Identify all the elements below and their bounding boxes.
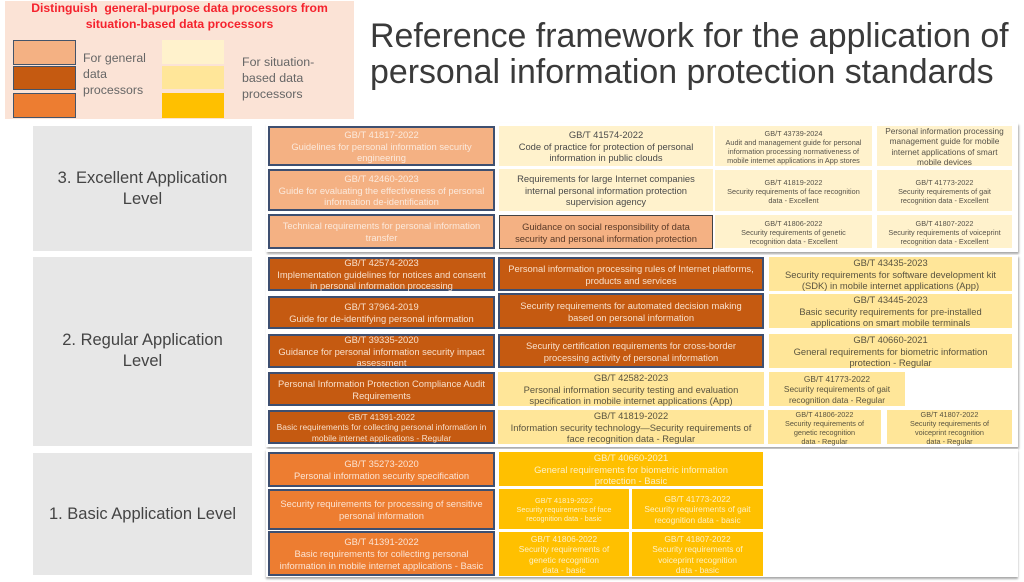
title: Reference framework for the application of xyxy=(370,17,1009,55)
situation standard 41806 basic xyxy=(499,532,629,576)
general standard platforms rules xyxy=(498,257,764,291)
situation standard 41807 excellent: Security requirements of voiceprint xyxy=(888,228,1001,236)
situation standard 40660 regular: protection - Regular xyxy=(849,357,932,368)
situation standard 41806 regular: genetic recognition xyxy=(794,428,855,436)
situation standard 41773 basic xyxy=(632,489,763,529)
panel: basic level standards xyxy=(266,449,1018,577)
situation standard 41806 regular: Security requirements of xyxy=(785,418,864,428)
situation standard 41819 basic xyxy=(499,489,629,529)
situation standard 41574: GB/T 41574-2022 xyxy=(569,129,643,140)
general standard 42574: Implementation guidelines for notices and consent xyxy=(277,269,486,280)
situation standard 41806 excellent: Security requirements of genetic xyxy=(741,228,846,236)
situation standard 41574: information in public clouds xyxy=(549,152,663,163)
general standard 37964: GB/T 37964-2019 xyxy=(344,301,419,312)
situation standard 41806 excellent xyxy=(715,215,872,248)
general standard transfer: Technical requirements for personal information xyxy=(283,220,480,231)
level label 2: 2. Regular Application xyxy=(62,331,223,349)
situation standard 41819 basic: GB/T 41819-2022 xyxy=(535,496,593,505)
general standard 39335: GB/T 39335-2020 xyxy=(344,334,419,345)
general standard 39335 xyxy=(268,334,495,368)
situation standard 41773 excellent: GB/T 41773-2022 xyxy=(916,178,973,186)
situation standard smart mobile devices: mobile devices xyxy=(917,157,972,167)
general standard 41391 regular: Basic requirements for collecting personal information in xyxy=(277,422,486,432)
situation standard 43435: (SDK) in mobile internet applications (App) xyxy=(802,280,979,291)
general standard 42574: in personal information processing xyxy=(310,280,453,291)
panel: regular level standards xyxy=(266,255,1018,447)
swatch: situation regular xyxy=(162,66,224,89)
general standard social responsibility: security and personal information protection xyxy=(515,232,697,244)
situation standard 43445: GB/T 43445-2023 xyxy=(853,294,928,305)
situation standard large internet companies: Requirements for large Internet companies xyxy=(517,173,695,184)
situation standard 43739: information processing normativeness of xyxy=(728,146,859,156)
situation standard 41807 excellent xyxy=(877,215,1012,248)
level label 3: Level xyxy=(123,190,162,208)
situation standard 40660 basic: GB/T 40660-2021 xyxy=(594,452,668,463)
situation standard 41806 excellent: recognition data - Excellent xyxy=(749,236,838,246)
general standard 41817 xyxy=(268,126,495,166)
swatch: situation excellent xyxy=(162,40,224,64)
general standard platforms rules: products and services xyxy=(585,274,677,286)
general standard cross-border xyxy=(498,334,764,368)
situation standard 40660 regular xyxy=(769,334,1012,368)
situation standard 41773 regular: Security requirements of gait xyxy=(784,384,890,394)
swatch: general excellent xyxy=(13,40,76,65)
general standard 37964 xyxy=(268,296,495,329)
situation standard 41773 regular: recognition data - Regular xyxy=(789,395,885,405)
situation standard 41574: Code of practice for protection of personal xyxy=(519,141,693,152)
general standard 41391 regular xyxy=(268,410,495,444)
panel: excellent level standards xyxy=(266,123,1018,252)
situation standard 43739: mobile internet applications in App stores xyxy=(727,156,860,164)
general standard 41391 regular: mobile internet applications - Regular xyxy=(312,433,451,443)
situation standard 43435: GB/T 43435-2023 xyxy=(853,257,928,268)
legend heading: Distinguish general-purpose data processors from xyxy=(31,1,328,15)
situation standard 41773 regular xyxy=(769,372,905,406)
general standard cross-border: processing activity of personal information xyxy=(544,352,718,362)
general standard compliance audit xyxy=(268,372,495,406)
situation standard 41807 basic: GB/T 41807-2022 xyxy=(664,534,731,544)
situation standard 40660 basic: General requirements for biometric information xyxy=(534,464,728,475)
situation standard 41773 excellent xyxy=(877,170,1012,211)
situation standard 40660 basic: protection - Basic xyxy=(595,475,667,486)
situation standard 41773 basic: Security requirements of gait xyxy=(644,504,751,514)
general standard 41817: engineering xyxy=(357,152,406,163)
general standard 42460: Guide for evaluating the effectiveness of personal xyxy=(279,185,484,196)
title: personal information protection standards xyxy=(370,53,994,91)
legend label: general xyxy=(83,51,146,97)
situation standard 43445 xyxy=(769,294,1012,328)
situation standard 42582 xyxy=(498,372,764,406)
general standard compliance audit: Requirements xyxy=(352,390,411,400)
legend heading xyxy=(31,1,328,31)
situation standard smart mobile devices xyxy=(877,126,1012,166)
situation standard 41819 regular: face recognition data - Regular xyxy=(567,433,695,444)
situation standard 43739: Audit and management guide for personal xyxy=(726,138,861,146)
situation standard 42582: GB/T 42582-2023 xyxy=(594,372,668,383)
legend label: general: data xyxy=(83,67,107,81)
level label 2 xyxy=(33,257,252,446)
level label 2: Level xyxy=(123,352,162,370)
general standard social responsibility: Guidance on social responsibility of data xyxy=(522,221,690,232)
situation standard 41819 basic: Security requirements of face xyxy=(517,505,611,514)
situation standard 41807 excellent: recognition data - Excellent xyxy=(900,236,989,246)
level label 1: 1. Basic Application Level xyxy=(49,505,236,523)
situation standard 41807 regular: data - Regular xyxy=(926,436,973,446)
general standard 41391 regular: GB/T 41391-2022 xyxy=(348,412,415,422)
situation standard 41819 excellent: data - Excellent xyxy=(768,196,819,204)
situation standard 41807 regular: GB/T 41807-2022 xyxy=(921,410,978,418)
situation standard 40660 regular: General requirements for biometric information xyxy=(794,346,987,357)
situation standard 41807 basic: Security requirements of xyxy=(652,544,743,554)
general standard transfer: transfer xyxy=(366,232,397,243)
general standard 37964: Guide for de-identifying personal information xyxy=(289,313,474,324)
situation standard 41806 basic: Security requirements of xyxy=(519,544,609,554)
situation standard 41806 excellent: GB/T 41806-2022 xyxy=(765,218,822,228)
situation standard 41773 excellent: Security requirements of gait xyxy=(898,186,991,196)
situation standard 41574 xyxy=(499,126,713,166)
general standard 42574 xyxy=(268,257,495,291)
situation standard large internet companies: supervision agency xyxy=(566,196,646,207)
general standard automated decision making: based on personal information xyxy=(568,312,694,322)
situation standard 41806 basic: data - basic xyxy=(542,565,586,575)
general standard 42574: GB/T 42574-2023 xyxy=(344,257,419,268)
level label 3 xyxy=(33,126,252,251)
situation standard 41819 excellent: Security requirements of face recognition xyxy=(727,186,860,196)
situation standard large internet companies xyxy=(499,169,713,211)
legend label: situation: based data xyxy=(242,71,303,85)
general standard compliance audit: Personal Information Protection Compliance Audit xyxy=(278,378,485,389)
general standard 41817: Guidelines for personal information security xyxy=(291,141,472,152)
situation standard smart mobile devices: Personal information processing xyxy=(885,126,1004,136)
situation standard 41807 basic xyxy=(632,532,763,576)
situation standard 43739: GB/T 43739-2024 xyxy=(765,128,822,138)
general standard 35273: GB/T 35273-2020 xyxy=(344,458,419,469)
general standard sensitive information xyxy=(268,489,495,530)
general standard transfer xyxy=(268,214,495,249)
general standard 41391 basic: GB/T 41391-2022 xyxy=(344,536,419,547)
situation standard 41773 basic: recognition data - basic xyxy=(654,515,741,525)
situation standard 43435 xyxy=(769,257,1012,291)
general standard 42460: information de-identification xyxy=(324,196,439,207)
general standard sensitive information: Security requirements for processing of sensitive xyxy=(280,498,483,509)
situation standard 41819 basic: recognition data - basic xyxy=(526,514,602,523)
situation standard 41773 excellent: recognition data - Excellent xyxy=(900,196,989,204)
general standard 35273: Personal information security specification xyxy=(294,470,469,481)
situation standard 41806 basic: GB/T 41806-2022 xyxy=(531,534,597,544)
general standard 41391 basic: information in mobile internet applications - Basic xyxy=(280,560,483,571)
situation standard 41819 regular: Information security technology—Security requirements of xyxy=(511,422,751,433)
situation standard large internet companies: internal personal information protection xyxy=(525,185,687,196)
situation standard 41819 regular: GB/T 41819-2022 xyxy=(594,410,668,421)
legend label: situation: For situation- xyxy=(242,55,314,69)
legend label: general: processors xyxy=(83,83,143,97)
general standard 39335: Guidance for personal information security impact xyxy=(278,346,485,357)
situation standard 41773 regular: GB/T 41773-2022 xyxy=(804,374,870,384)
general standard automated decision making xyxy=(498,293,764,329)
situation standard 41807 regular xyxy=(887,410,1012,444)
general standard 39335: assessment xyxy=(356,357,406,368)
situation standard 43739 xyxy=(715,126,872,166)
general standard 42460: GB/T 42460-2023 xyxy=(344,173,419,184)
situation standard 40660 basic xyxy=(499,452,763,486)
legend label: situation xyxy=(242,55,314,101)
situation standard 42582: Personal information security testing and evaluation xyxy=(524,384,738,395)
situation standard 43445: Basic security requirements for pre-installed xyxy=(799,306,982,317)
general standard 41817: GB/T 41817-2022 xyxy=(344,129,419,140)
swatch: general basic xyxy=(13,93,76,118)
general standard social responsibility xyxy=(499,215,713,249)
general standard cross-border: Security certification requirements for cross-border xyxy=(526,340,736,351)
situation standard 43435: Security requirements for software development kit xyxy=(785,269,996,280)
situation standard 40660 regular: GB/T 40660-2021 xyxy=(853,334,928,345)
general standard sensitive information: personal information xyxy=(339,510,424,521)
swatch: general regular xyxy=(13,66,76,90)
situation standard 41806 regular xyxy=(768,410,881,444)
general standard 41391 basic xyxy=(268,531,495,576)
general standard automated decision making: Security requirements for automated decision making xyxy=(520,300,742,311)
situation standard 41819 excellent xyxy=(715,170,872,211)
situation standard 41807 basic: voiceprint recognition xyxy=(658,554,737,564)
situation standard 41806 basic: genetic recognition xyxy=(529,554,599,564)
title xyxy=(370,17,1009,91)
general standard 41391 basic: Basic requirements for collecting personal xyxy=(294,548,469,559)
general standard 35273 xyxy=(268,452,495,487)
level label 1 xyxy=(33,453,252,575)
situation standard smart mobile devices: management guide for mobile xyxy=(890,136,999,146)
situation standard 41806 regular: data - Regular xyxy=(801,436,848,446)
situation standard 41819 excellent: GB/T 41819-2022 xyxy=(765,178,822,186)
situation standard 41773 basic: GB/T 41773-2022 xyxy=(664,494,731,504)
situation standard 41807 regular: Security requirements of xyxy=(910,418,989,428)
level label 3: 3. Excellent Application xyxy=(58,169,227,187)
situation standard 41807 regular: voiceprint recognition xyxy=(915,428,984,436)
situation standard 43445: applications on smart mobile terminals xyxy=(811,317,970,328)
legend label: situation: processors xyxy=(242,87,303,101)
situation standard 41807 basic: data - basic xyxy=(676,565,719,575)
situation standard 42582: specification in mobile internet applications (App) xyxy=(529,395,733,406)
situation standard 41807 excellent: GB/T 41807-2022 xyxy=(916,218,973,228)
general standard 42460 xyxy=(268,169,495,211)
legend label: general: For general xyxy=(83,51,146,65)
legend heading: situation-based data processors xyxy=(86,17,273,31)
situation standard 41819 regular xyxy=(498,410,764,444)
situation standard smart mobile devices: internet applications of smart xyxy=(891,146,998,156)
situation standard 41806 regular: GB/T 41806-2022 xyxy=(796,410,853,418)
swatch: situation basic xyxy=(162,93,224,118)
legend panel xyxy=(5,1,354,119)
general standard platforms rules: Personal information processing rules of Internet platforms, xyxy=(508,263,754,274)
